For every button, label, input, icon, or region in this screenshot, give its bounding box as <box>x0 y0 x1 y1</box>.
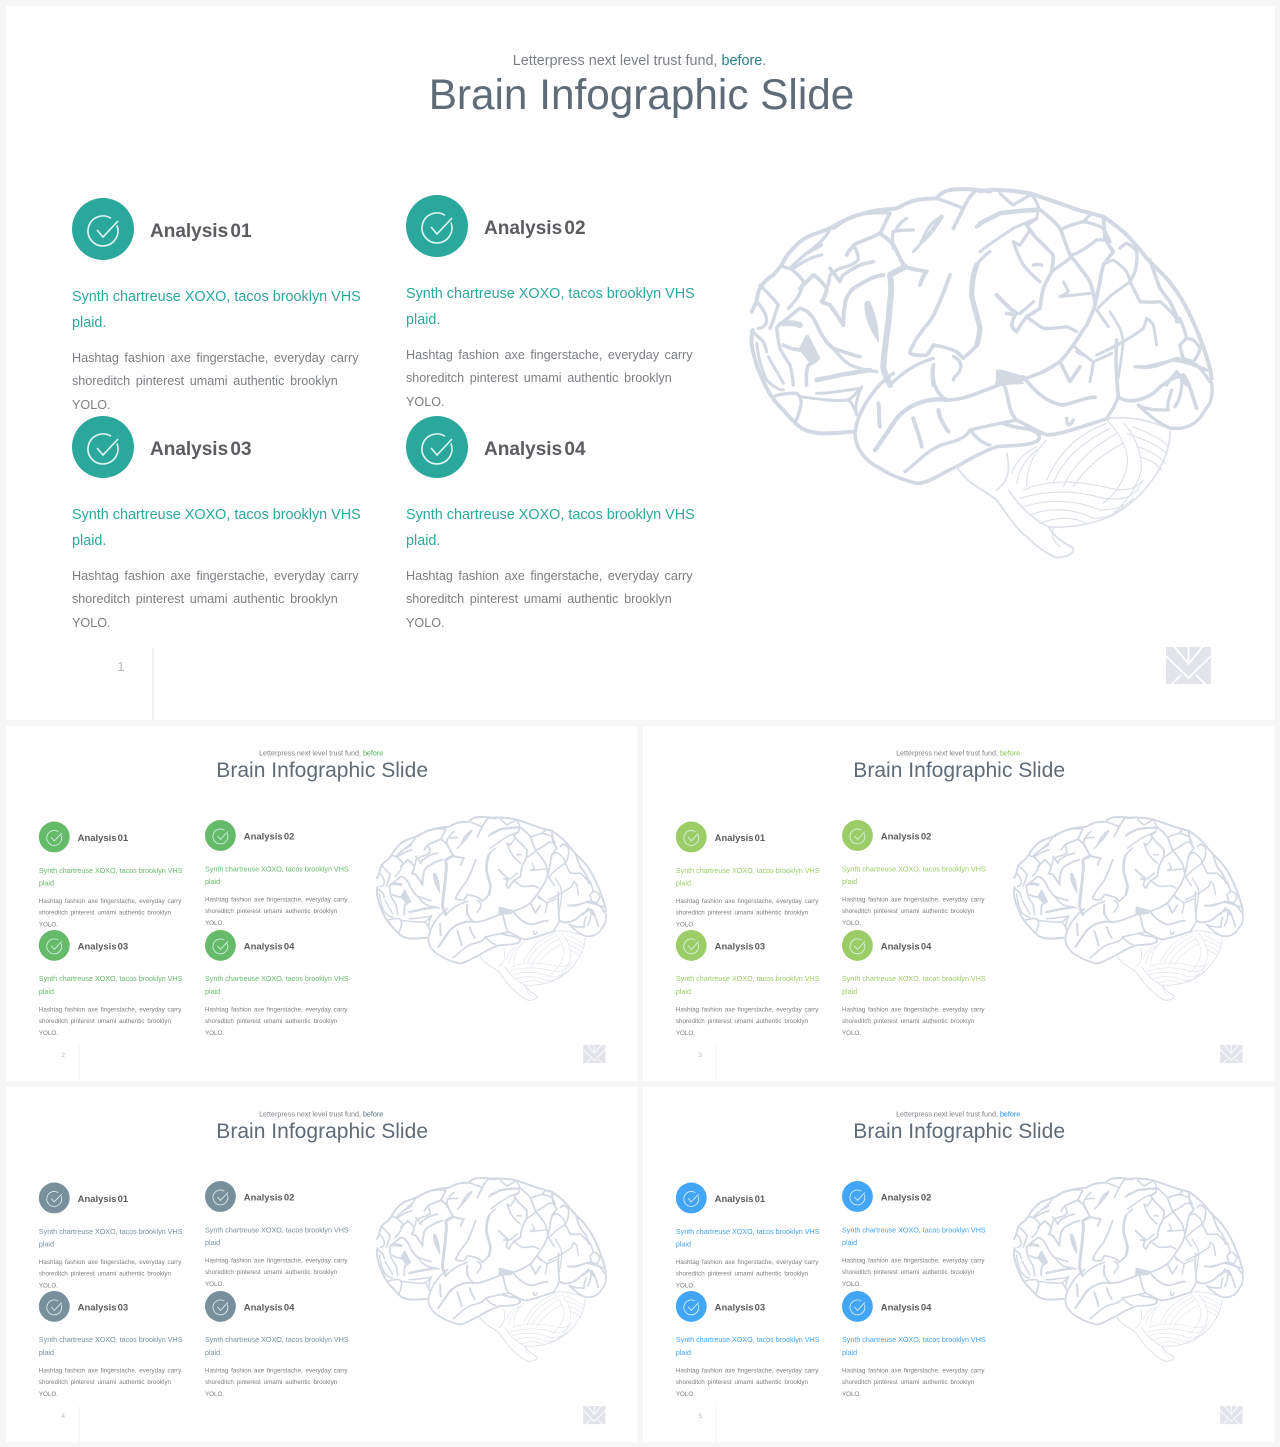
body text <box>39 1006 182 1036</box>
body text <box>72 568 359 630</box>
item title: Analysis 01 <box>78 1193 128 1204</box>
accent text: Synth chartreuse XOXO, tacos brooklyn VHS <box>842 975 986 983</box>
body text <box>406 348 693 408</box>
accent text <box>406 286 695 328</box>
accent text <box>205 865 349 886</box>
item title: Analysis 01 <box>715 833 765 843</box>
body text: YOLO. <box>676 1390 695 1397</box>
body text: YOLO. <box>676 1029 695 1036</box>
body text <box>39 1256 181 1291</box>
body text: Hashtag fashion axe fingerstache, everyday carry <box>842 896 985 903</box>
accent text: plaid <box>676 1348 691 1356</box>
body text <box>676 1364 818 1399</box>
body text: YOLO. <box>72 616 110 630</box>
body text <box>676 1256 818 1291</box>
body text <box>72 350 359 412</box>
icon: check circle <box>39 930 70 961</box>
icon: logo <box>1220 1045 1242 1063</box>
accent text: Synth chartreuse XOXO, tacos brooklyn VHS <box>842 1335 986 1343</box>
page number: 4 <box>61 1411 65 1419</box>
body text: Hashtag fashion axe fingerstache, everyday carry <box>72 568 359 582</box>
body text: YOLO. <box>406 616 444 630</box>
body text <box>205 896 348 926</box>
body text: shoreditch pinterest umami authentic brooklyn <box>842 908 974 915</box>
heading: Brain Infographic Slide <box>429 71 854 118</box>
icon: check circle <box>72 198 134 260</box>
accent text <box>205 975 349 996</box>
page number: 5 <box>698 1411 702 1419</box>
item title: Analysis 02 <box>244 1192 294 1202</box>
body text: shoreditch pinterest umami authentic brooklyn <box>39 1378 171 1385</box>
body text: YOLO. <box>406 394 444 408</box>
panel: analysis 04 <box>842 930 991 1044</box>
slide 2: green slide <box>6 726 637 1081</box>
item title: Analysis 01 <box>715 1193 765 1204</box>
icon: check circle <box>39 822 70 852</box>
body text: Hashtag fashion axe fingerstache, everyday carry <box>72 350 359 364</box>
body text: Hashtag fashion axe fingerstache, everyday carry <box>39 1366 181 1373</box>
panel: analysis 04 <box>205 1290 354 1405</box>
accent text: Synth chartreuse XOXO, tacos brooklyn VHS <box>205 1226 349 1234</box>
panel: analysis 01 <box>676 1182 825 1296</box>
body text <box>205 1254 348 1289</box>
panel: analysis 01 <box>72 198 361 412</box>
panel: analysis 02 <box>406 195 695 408</box>
panel: analysis 01 <box>38 822 182 928</box>
icon: check circle <box>676 1182 707 1213</box>
body text: Hashtag fashion axe fingerstache, everyday carry <box>406 568 693 582</box>
body text <box>406 568 693 630</box>
page number: 3 <box>698 1051 702 1058</box>
icon: check circle <box>676 822 707 852</box>
icon: check circle <box>676 1290 707 1321</box>
heading <box>6 1108 638 1144</box>
body text: YOLO. <box>205 1280 224 1287</box>
accent text: plaid <box>676 1240 691 1248</box>
icon: check circle <box>842 820 873 851</box>
icon: check circle <box>39 1182 70 1213</box>
body text: shoreditch pinterest umami authentic brooklyn <box>205 1268 337 1275</box>
panel: analysis 03 <box>676 1290 825 1405</box>
body text <box>39 1364 181 1399</box>
brain illustration <box>371 1168 615 1367</box>
panel: analysis 02 <box>205 820 349 926</box>
accent text: plaid <box>842 878 857 886</box>
accent text: plaid <box>39 1348 54 1356</box>
body text: Hashtag fashion axe fingerstache, everyday carry <box>205 1006 348 1013</box>
body text: Hashtag fashion axe fingerstache, everyday carry <box>205 1256 348 1263</box>
body text: Hashtag fashion axe fingerstache, everyday carry <box>676 897 818 904</box>
body text: YOLO. <box>39 1029 58 1036</box>
accent text: Synth chartreuse XOXO, tacos brooklyn VHS <box>39 1227 182 1235</box>
icon: check circle <box>205 1290 236 1321</box>
accent text: Synth chartreuse XOXO, tacos brooklyn VHS <box>39 867 182 875</box>
body text: YOLO. <box>842 1029 861 1036</box>
body text: YOLO. <box>39 1390 58 1397</box>
body text: Hashtag fashion axe fingerstache, everyday carry <box>676 1006 818 1013</box>
panel: analysis 03 <box>72 416 361 630</box>
body text: Hashtag fashion axe fingerstache, everyday carry <box>676 1366 818 1373</box>
accent text: Synth chartreuse XOXO, tacos brooklyn VHS <box>39 975 182 983</box>
body text: Hashtag fashion axe fingerstache, everyday carry <box>842 1006 985 1013</box>
icon: logo <box>1220 1405 1242 1424</box>
accent text: plaid. <box>72 314 106 330</box>
item title: Analysis 02 <box>881 1192 931 1202</box>
slide 1: main teal slide <box>6 6 1275 720</box>
item title: Analysis 02 <box>881 831 931 842</box>
heading: Brain Infographic Slide <box>216 758 428 782</box>
icon: check circle <box>842 1181 873 1211</box>
accent text: plaid <box>205 878 220 886</box>
panel: analysis 03 <box>676 930 820 1036</box>
body text: YOLO. <box>205 919 224 926</box>
body text: Hashtag fashion axe fingerstache, everyday carry <box>39 1258 181 1265</box>
accent text: Synth chartreuse XOXO, tacos brooklyn VHS <box>406 506 695 522</box>
icon: check circle <box>842 930 873 961</box>
body text: shoreditch pinterest umami authentic brooklyn <box>676 1378 808 1385</box>
body text: shoreditch pinterest umami authentic brooklyn <box>406 371 672 385</box>
heading: Letterpress next level trust fund, before <box>259 1110 383 1118</box>
accent text <box>842 1333 986 1359</box>
body text: Hashtag fashion axe fingerstache, everyday carry <box>842 1256 985 1263</box>
body text: Hashtag fashion axe fingerstache, everyday carry <box>39 1006 181 1013</box>
panel: analysis 03 <box>38 930 182 1036</box>
item title: Analysis 02 <box>244 831 294 842</box>
heading: Letterpress next level trust fund, before <box>896 1110 1020 1118</box>
accent text: plaid. <box>406 532 440 548</box>
item title: Analysis 01 <box>150 220 252 242</box>
panel: analysis 03 <box>39 1290 188 1405</box>
accent text: plaid <box>39 879 54 887</box>
heading: Brain Infographic Slide <box>216 1119 428 1142</box>
body text: Hashtag fashion axe fingerstache, everyday carry <box>842 1366 985 1373</box>
accent text <box>842 973 986 998</box>
accent text: plaid <box>842 1348 857 1356</box>
body text <box>842 896 985 926</box>
brain illustration <box>1008 808 1252 1007</box>
accent text <box>39 975 182 996</box>
panel: analysis 01 <box>39 1182 188 1296</box>
body text: Hashtag fashion axe fingerstache, everyday carry <box>205 1366 348 1373</box>
heading: Letterpress next level trust fund, before <box>259 749 383 757</box>
body text: shoreditch pinterest umami authentic brooklyn <box>205 908 337 915</box>
accent text: plaid <box>842 988 857 996</box>
icon: check circle <box>205 1181 236 1211</box>
panel: analysis 02 <box>842 820 986 926</box>
accent text <box>676 975 820 996</box>
item title: Analysis 03 <box>78 1302 128 1312</box>
body text: shoreditch pinterest umami authentic brooklyn <box>842 1018 974 1024</box>
accent text: plaid. <box>72 532 106 548</box>
accent text <box>205 1333 349 1359</box>
heading: Letterpress next level trust fund, before <box>896 749 1020 757</box>
body text: shoreditch pinterest umami authentic brooklyn <box>39 1018 171 1024</box>
body text: shoreditch pinterest umami authentic brooklyn <box>676 1270 808 1277</box>
body text: Hashtag fashion axe fingerstache, everyday carry <box>205 896 348 903</box>
panel: analysis 02 <box>842 1181 991 1295</box>
accent text: plaid <box>205 1348 220 1356</box>
body text: Hashtag fashion axe fingerstache, everyday carry <box>39 897 181 904</box>
accent text <box>72 506 361 548</box>
accent text <box>406 506 695 548</box>
body text: shoreditch pinterest umami authentic brooklyn <box>676 1018 808 1024</box>
item title: Analysis 03 <box>715 1302 765 1312</box>
slide 4: slate slide <box>6 1086 637 1442</box>
accent text <box>676 867 820 887</box>
item title: Analysis 03 <box>715 941 765 952</box>
accent text <box>72 288 361 330</box>
accent text <box>39 867 182 887</box>
item title: Analysis 04 <box>881 1302 931 1312</box>
body text <box>39 897 182 928</box>
accent text: Synth chartreuse XOXO, tacos brooklyn VHS <box>406 286 695 302</box>
body text <box>205 1364 348 1399</box>
accent text: Synth chartreuse XOXO, tacos brooklyn VHS <box>676 1335 819 1343</box>
accent text: Synth chartreuse XOXO, tacos brooklyn VHS <box>842 1226 986 1234</box>
accent text: plaid. <box>406 312 440 328</box>
body text: shoreditch pinterest umami authentic brooklyn <box>205 1378 337 1385</box>
body text: YOLO. <box>39 1281 58 1288</box>
body text: shoreditch pinterest umami authentic brooklyn <box>72 374 338 388</box>
item title: Analysis 02 <box>484 218 586 238</box>
accent text <box>842 865 986 886</box>
page number: 2 <box>61 1051 65 1058</box>
accent text: plaid <box>842 1238 857 1246</box>
accent text: Synth chartreuse XOXO, tacos brooklyn VHS <box>676 975 819 983</box>
icon: check circle <box>39 1290 70 1321</box>
heading <box>643 1108 1275 1144</box>
brain illustration <box>1008 1168 1252 1367</box>
heading: Brain Infographic Slide <box>853 1119 1065 1142</box>
accent text: Synth chartreuse XOXO, tacos brooklyn VHS <box>39 1335 182 1343</box>
body text: Hashtag fashion axe fingerstache, everyday carry <box>406 348 693 362</box>
page number: 1 <box>117 659 125 674</box>
slide 3: light green slide <box>643 726 1274 1081</box>
body text: YOLO. <box>72 398 110 412</box>
accent text: Synth chartreuse XOXO, tacos brooklyn VHS <box>205 865 349 873</box>
item title: Analysis 01 <box>78 833 128 843</box>
body text <box>676 1006 818 1036</box>
accent text: plaid <box>205 1238 220 1246</box>
body text <box>842 1364 985 1399</box>
icon: logo <box>583 1405 605 1424</box>
icon: logo <box>583 1045 606 1063</box>
body text: YOLO. <box>676 1281 695 1288</box>
accent text <box>676 1333 819 1359</box>
accent text <box>39 1225 182 1250</box>
body text: shoreditch pinterest umami authentic brooklyn <box>72 592 338 606</box>
brain illustration <box>376 816 607 1001</box>
body text: shoreditch pinterest umami authentic brooklyn <box>205 1018 337 1024</box>
accent text: plaid <box>676 988 691 996</box>
body text <box>676 897 818 928</box>
accent text: plaid <box>39 988 54 996</box>
icon: logo <box>1166 647 1211 684</box>
icon: check circle <box>205 820 236 851</box>
body text: YOLO. <box>842 1390 861 1397</box>
body text: shoreditch pinterest umami authentic brooklyn <box>39 909 171 916</box>
heading: Letterpress next level trust fund, before. <box>513 53 766 69</box>
item title: Analysis 04 <box>484 438 586 460</box>
heading: Brain Infographic Slide <box>853 758 1065 782</box>
icon: check circle <box>676 930 707 961</box>
item title: Analysis 04 <box>244 941 294 952</box>
accent text: Synth chartreuse XOXO, tacos brooklyn VHS <box>842 865 986 873</box>
body text: YOLO. <box>205 1390 224 1397</box>
body text <box>842 1254 985 1289</box>
accent text: plaid <box>39 1240 54 1248</box>
body text: shoreditch pinterest umami authentic brooklyn <box>39 1270 171 1277</box>
accent text <box>39 1333 182 1359</box>
body text: YOLO. <box>676 921 695 928</box>
accent text: plaid <box>205 988 220 996</box>
body text: shoreditch pinterest umami authentic brooklyn <box>842 1268 974 1275</box>
slide 5: blue slide <box>643 1086 1274 1442</box>
brain illustration <box>750 187 1214 558</box>
accent text: plaid <box>676 879 691 887</box>
body text: shoreditch pinterest umami authentic brooklyn <box>406 592 672 606</box>
accent text <box>205 1223 349 1249</box>
icon: check circle <box>205 930 236 961</box>
panel: analysis 02 <box>205 1181 354 1295</box>
accent text: Synth chartreuse XOXO, tacos brooklyn VHS <box>676 867 819 875</box>
panel: analysis 04 <box>205 930 349 1036</box>
body text: YOLO. <box>842 1280 861 1287</box>
icon: check circle <box>72 416 134 478</box>
item title: Analysis 03 <box>150 438 252 460</box>
body text <box>205 1006 348 1036</box>
item title: Analysis 04 <box>244 1302 294 1312</box>
body text: YOLO. <box>39 921 58 928</box>
accent text: Synth chartreuse XOXO, tacos brooklyn VHS <box>676 1227 819 1235</box>
accent text: Synth chartreuse XOXO, tacos brooklyn VHS <box>72 288 361 304</box>
accent text <box>676 1225 819 1250</box>
accent text: Synth chartreuse XOXO, tacos brooklyn VHS <box>205 975 349 983</box>
panel: analysis 04 <box>842 1290 991 1405</box>
icon: check circle <box>406 416 468 478</box>
accent text: Synth chartreuse XOXO, tacos brooklyn VHS <box>72 506 361 522</box>
icon: check circle <box>406 195 468 257</box>
accent text <box>842 1223 986 1249</box>
body text: YOLO. <box>842 919 861 926</box>
body text: Hashtag fashion axe fingerstache, everyday carry <box>676 1258 818 1265</box>
panel: analysis 04 <box>406 416 695 630</box>
icon: check circle <box>842 1290 873 1321</box>
panel: analysis 01 <box>676 822 820 928</box>
body text: shoreditch pinterest umami authentic brooklyn <box>842 1378 974 1385</box>
body text: shoreditch pinterest umami authentic brooklyn <box>676 909 808 916</box>
item title: Analysis 04 <box>881 941 931 952</box>
accent text: Synth chartreuse XOXO, tacos brooklyn VHS <box>205 1335 349 1343</box>
body text <box>842 1004 985 1039</box>
item title: Analysis 03 <box>78 941 128 952</box>
body text: YOLO. <box>205 1029 224 1036</box>
